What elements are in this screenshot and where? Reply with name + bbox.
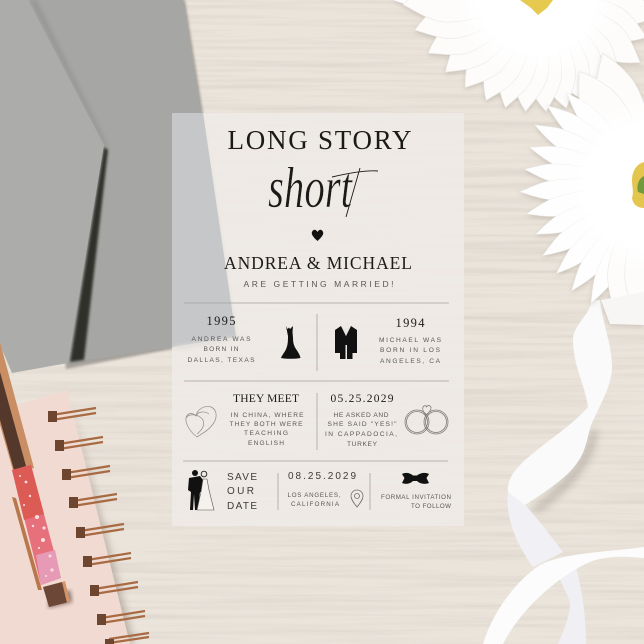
panel: Andrea birth: 1995 <box>206 314 236 328</box>
script word: short: short <box>268 155 353 220</box>
vellum card <box>172 113 464 526</box>
panel: formal invitation note: TO FOLLOW <box>411 503 451 510</box>
icon: bride and groom <box>188 470 214 510</box>
envelope back panel <box>28 0 238 369</box>
panel: wedding date and place: 08.25.2029 <box>288 471 356 482</box>
panel: Andrea birth <box>188 314 255 364</box>
spiral binding <box>48 408 149 644</box>
panel: Andrea birth: DALLAS, TEXAS <box>188 357 255 364</box>
notebook <box>0 390 134 644</box>
panel: Michael birth: 1994 <box>396 316 425 330</box>
panel: proposal: IN CAPPADOCIA, <box>325 431 397 438</box>
panel: proposal: HE ASKED AND <box>334 412 389 419</box>
subheading: ARE GETTING MARRIED! <box>244 279 394 289</box>
panel: Michael birth: ANGELES, CA <box>380 358 441 365</box>
flower: right daisy <box>519 46 644 325</box>
panel: Andrea birth: ANDREA WAS <box>192 336 251 343</box>
envelope front flap <box>0 0 108 373</box>
panel: save our date: OUR <box>227 486 254 497</box>
flower: top daisy <box>393 0 644 113</box>
ribbon <box>483 300 644 644</box>
icon: wedding rings <box>405 406 448 434</box>
panel: wedding date and place: LOS ANGELES, <box>288 492 341 499</box>
panel: proposal: 05.25.2029 <box>330 393 394 405</box>
panel: Andrea birth: BORN IN <box>204 346 239 353</box>
icon: bow tie <box>402 473 429 484</box>
icon: dress <box>281 326 300 359</box>
names heading: ANDREA & MICHAEL <box>224 253 412 273</box>
panel: Michael birth <box>379 316 442 365</box>
icon: heart <box>312 230 323 241</box>
panel: they meet <box>230 393 304 447</box>
icon: tuxedo <box>335 326 357 359</box>
panel: Michael birth: BORN IN LOS <box>380 347 441 354</box>
panel: they meet: IN CHINA, WHERE <box>230 412 304 419</box>
panel: formal invitation note <box>381 494 451 510</box>
panel: they meet: TEACHING <box>244 430 288 437</box>
panel: Michael birth: MICHAEL WAS <box>379 337 442 344</box>
divider rules <box>183 303 449 510</box>
panel: they meet: THEY BOTH WERE <box>230 421 303 428</box>
panel: proposal: SHE SAID "YES!" <box>328 421 397 428</box>
rose gold glitter pen <box>0 342 72 608</box>
panel: they meet: THEY MEET <box>233 393 299 405</box>
icon: location pin <box>351 490 363 507</box>
panel: save our date: SAVE <box>227 472 257 483</box>
panel: save our date: DATE <box>227 501 257 512</box>
panel: proposal <box>325 393 397 448</box>
panel: save our date <box>227 472 257 512</box>
panel: they meet: ENGLISH <box>248 440 284 447</box>
panel: proposal: TURKEY <box>347 441 378 448</box>
panel: wedding date and place: CALIFORNIA <box>291 501 340 508</box>
panel: wedding date and place <box>288 471 356 508</box>
icon: two outline hearts <box>186 406 216 437</box>
panel: formal invitation note: FORMAL INVITATION <box>381 494 451 501</box>
title: LONG STORY: LONG STORY <box>228 125 412 155</box>
